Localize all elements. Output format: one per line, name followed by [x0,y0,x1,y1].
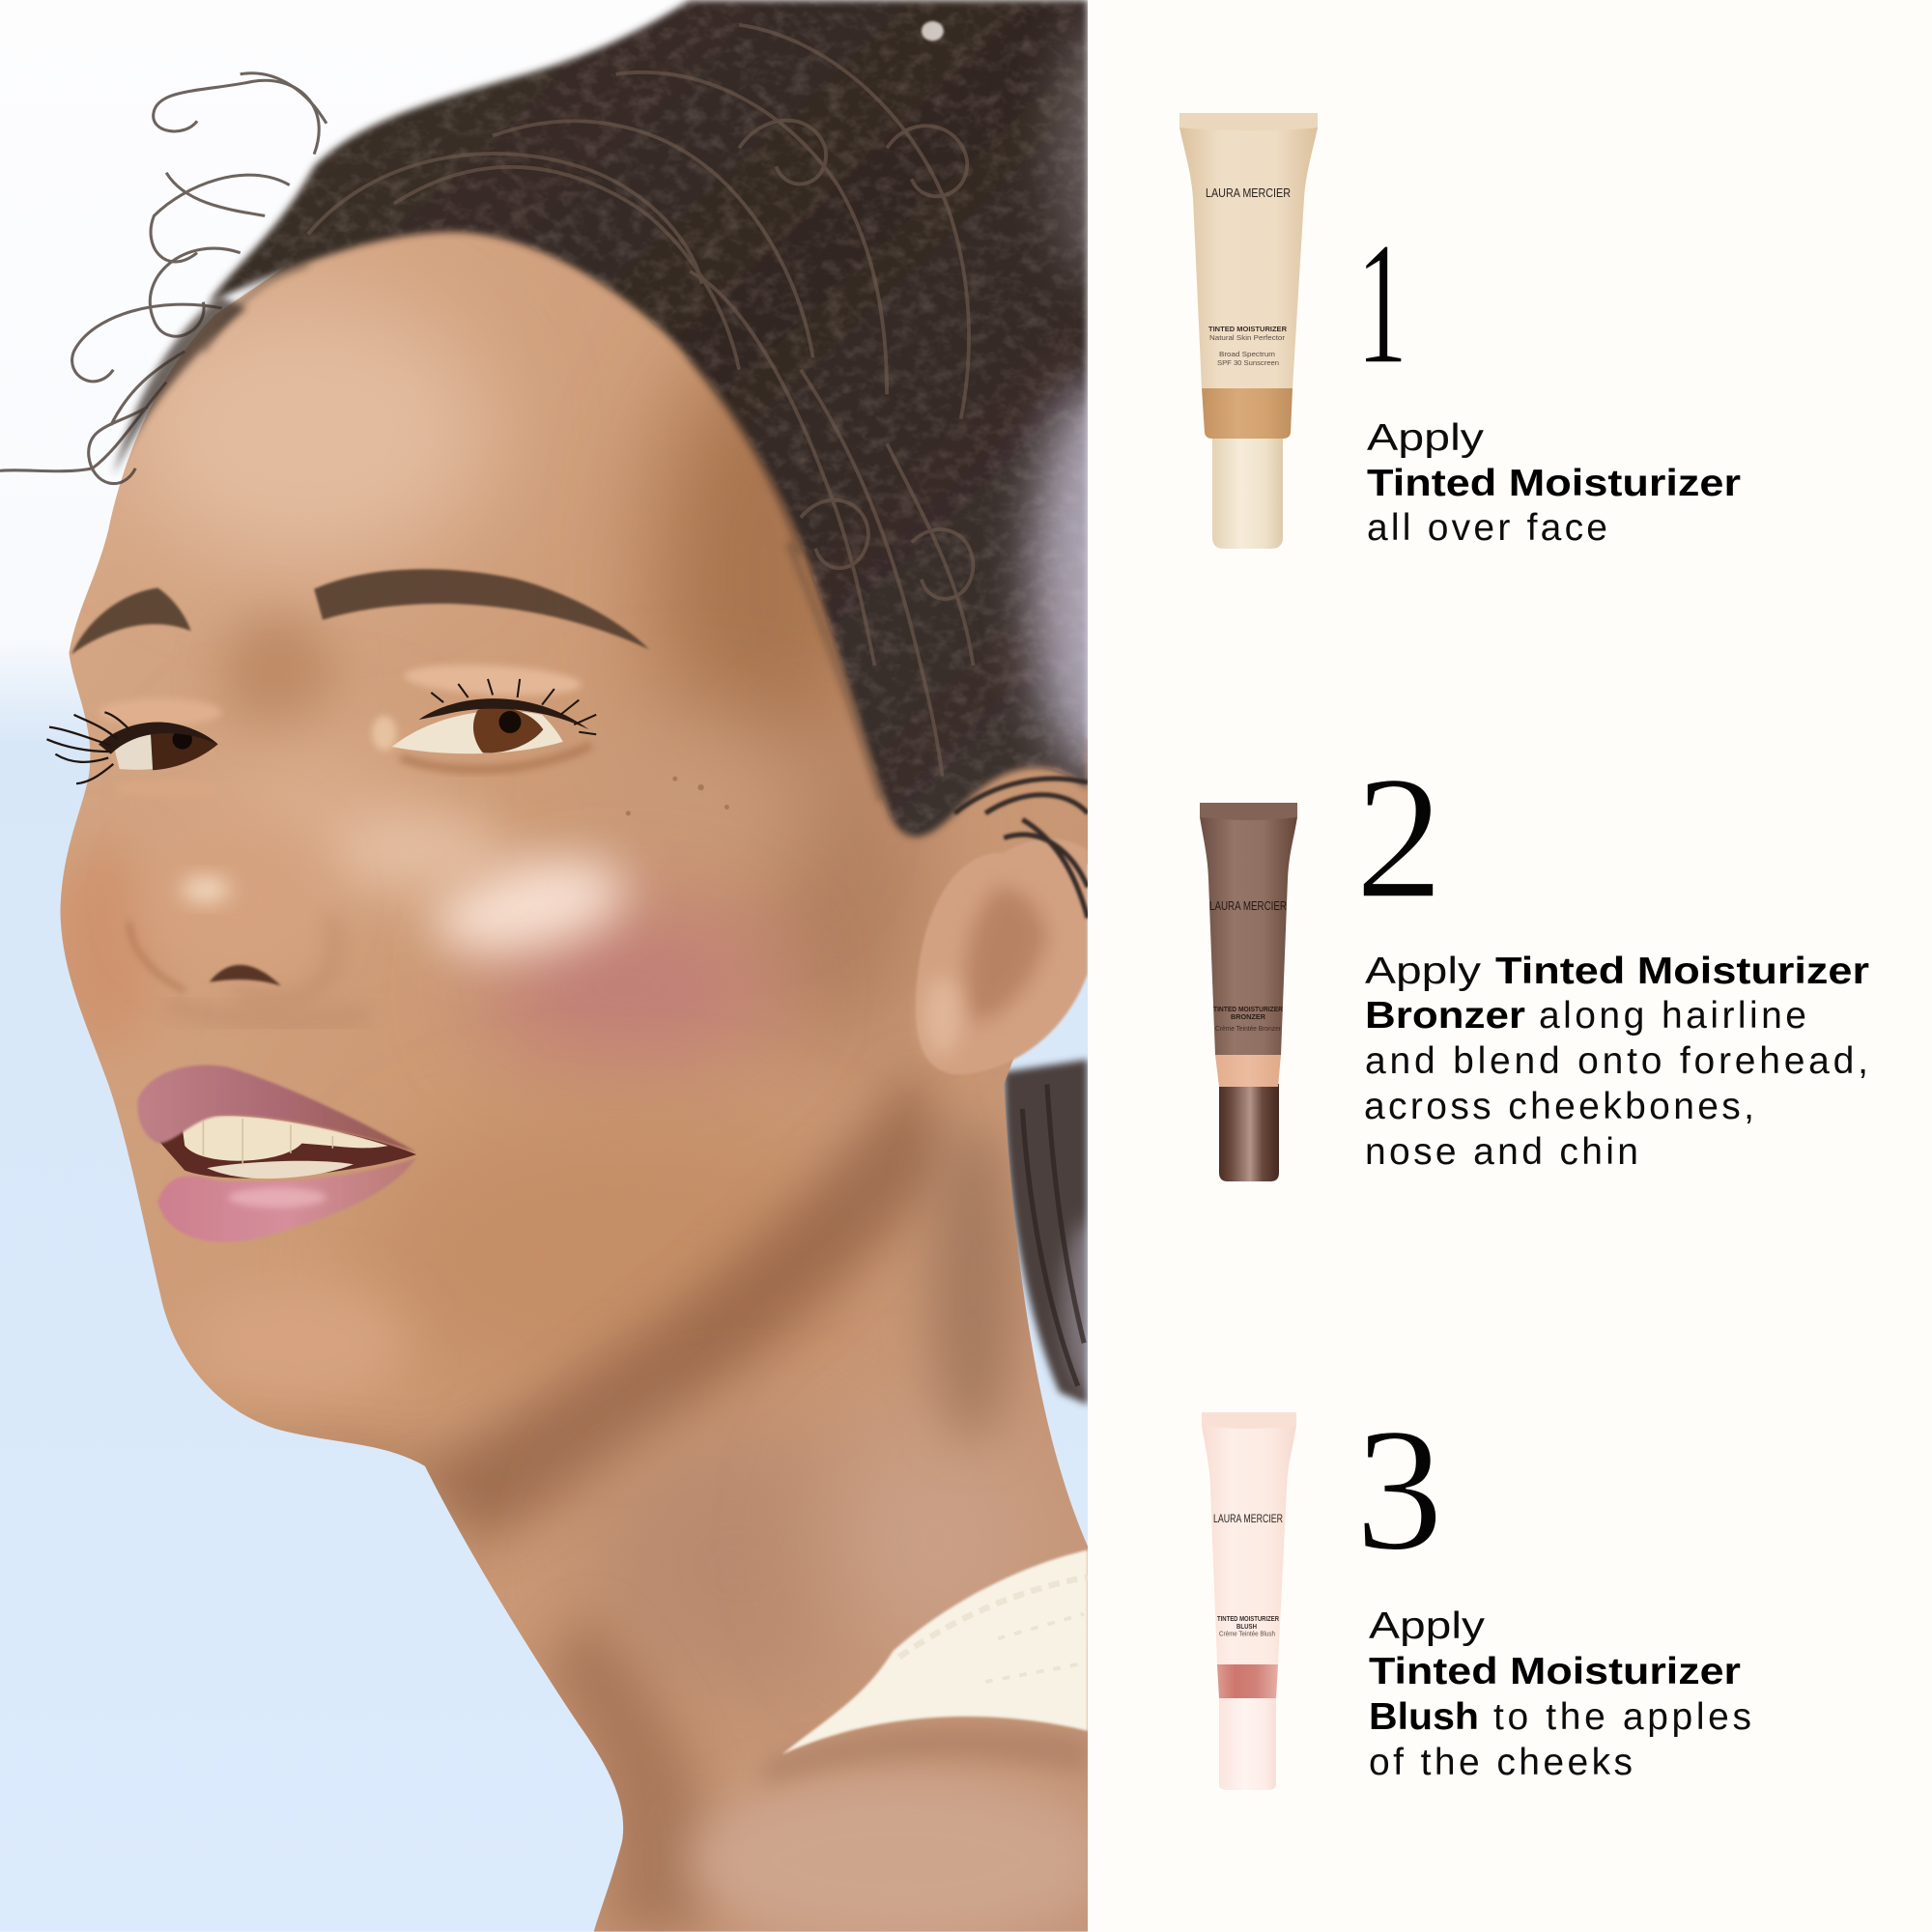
step 2 instructions [1364,951,1869,1173]
step 2 instructions: Apply [1365,951,1482,992]
step 3 product tube: Tinted Moisturizer Blush: TINTED MOISTURIZER [1217,1614,1280,1623]
step 2 product tube: Tinted Moisturizer Bronzer: TINTED MOISTURIZER [1213,1005,1284,1013]
left eyebrow [71,588,191,654]
face, neck and shoulder skin [0,185,1109,1932]
right eyebrow [314,569,649,649]
step 2 instructions: Tinted Moisturizer [1495,951,1869,992]
step 1 instructions: Tinted Moisturizer [1367,463,1741,504]
panel: product steps column [1088,0,1932,1932]
mouth interior and teeth [157,1116,416,1179]
step 3 instructions: to the apples [1493,1696,1751,1738]
step 1 product tube: Tinted Moisturizer: Natural Skin Perfector [1209,333,1286,342]
ear [916,838,1088,1074]
step 3 product tube: Tinted Moisturizer Blush [1202,1412,1296,1790]
step 1 instructions: all over face [1367,507,1607,549]
step 1 product tube: Tinted Moisturizer: SPF 30 Sunscreen [1217,358,1279,367]
left eye [46,698,222,797]
stray curls and frizz on the left [0,73,327,484]
step 2 product tube: Tinted Moisturizer Bronzer: LAURA MERCIER [1209,899,1287,913]
hair wisps over the ear [954,779,1088,918]
step 3 product tube: Tinted Moisturizer Blush: Crème Teintée Blush [1219,1629,1275,1638]
step 2 product tube: Tinted Moisturizer Bronzer: BRONZER [1231,1012,1266,1021]
hair behind the neck [1004,1060,1118,1405]
step 2 instructions: nose and chin [1365,1131,1638,1173]
step 3 instructions [1369,1605,1751,1783]
step 2 product tube: Tinted Moisturizer Bronzer: Crème Teintée Bronzer [1215,1024,1281,1033]
step 2 instructions: along hairline [1539,995,1806,1037]
hair mass [207,0,1088,842]
hair along the left temple [113,296,246,474]
step 3 instructions: of the cheeks [1369,1742,1633,1783]
lower lip [157,1158,416,1242]
step 3 instructions: Tinted Moisturizer [1369,1651,1741,1692]
step 3 product tube: Tinted Moisturizer Blush: BLUSH [1236,1622,1257,1631]
step 2 instructions: Bronzer [1365,995,1525,1037]
step 1 product tube: Tinted Moisturizer: Broad Spectrum [1219,350,1275,358]
step 2 instructions: and blend onto forehead, [1365,1040,1868,1082]
upper lip [137,1065,416,1152]
freckles on the cheek [626,777,729,815]
step 1 product tube: Tinted Moisturizer: TINTED MOISTURIZER [1208,325,1288,333]
step 2 instructions: across cheekbones, [1364,1086,1754,1127]
panel: portrait photo of woman in profile [0,0,1088,1932]
step 1 instructions [1367,417,1741,549]
sky background [0,0,1088,1932]
step 3 instructions: Blush [1369,1696,1479,1738]
step 3 instructions: Apply [1369,1605,1486,1647]
step 1 product tube: Tinted Moisturizer: LAURA MERCIER [1206,186,1291,200]
crochet top [782,1549,1088,1754]
step 3 product tube: Tinted Moisturizer Blush: LAURA MERCIER [1213,1514,1283,1525]
nose [129,914,370,1022]
step 2 product tube: Tinted Moisturizer Bronzer [1200,803,1297,1181]
step 1 product tube: Tinted Moisturizer [1179,113,1318,549]
step 1 instructions: Apply [1367,417,1485,459]
hairline wisps [203,265,881,801]
right eye [372,661,596,770]
